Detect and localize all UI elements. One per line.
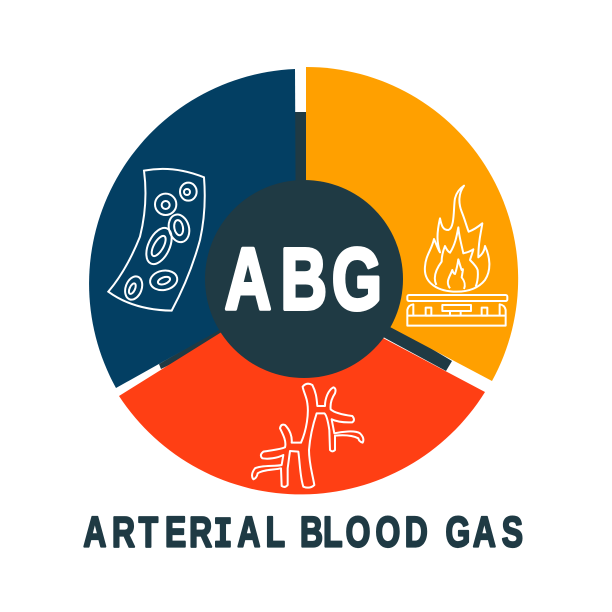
dark connector bars behind the segments: [159, 112, 452, 371]
title: Arterial Blood Gas: ARTERIAL BLOOD GAS: [83, 509, 523, 560]
center circle: [205, 180, 403, 378]
icon: branching artery: [252, 384, 363, 488]
icon: flame on gas burner: [407, 186, 507, 326]
panel: orange segment: [306, 67, 518, 381]
center label: ABG: ABG: [225, 232, 382, 328]
panel: blue segment: [89, 69, 296, 388]
panel: red segment: [119, 290, 485, 494]
icon: blood cells in vessel section: [108, 169, 205, 311]
